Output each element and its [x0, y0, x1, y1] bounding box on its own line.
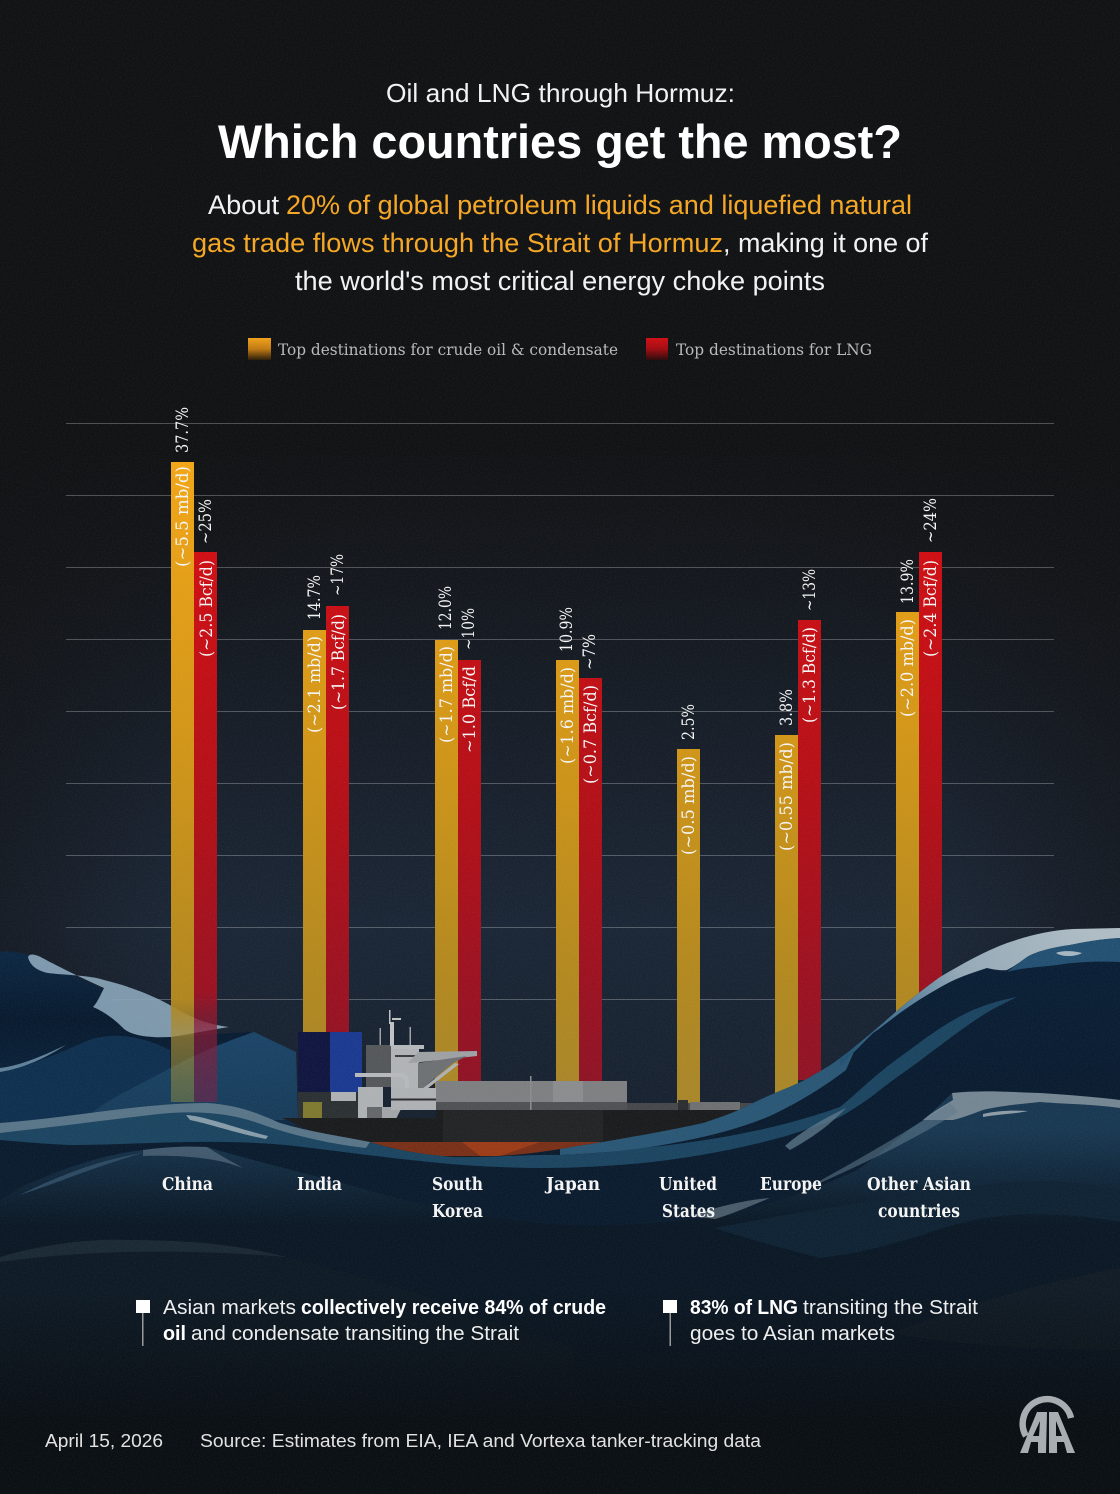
- second wave: [0, 1091, 1120, 1494]
- intro text block: About: [208, 190, 280, 220]
- value labels: Europe: (~0.55 mb/d): [777, 742, 796, 851]
- bars: India: [303, 606, 349, 1120]
- value labels: South Korea: ~1.0 Bcf/d: [460, 666, 479, 753]
- callout: crude oil share: collectively receive 84% of crude: [301, 1296, 606, 1319]
- value labels: India: (~1.7 Bcf/d): [329, 614, 348, 710]
- icon: AA logo: [1020, 1399, 1075, 1453]
- country labels: United: [659, 1175, 717, 1195]
- value labels: Other Asian countries: [898, 498, 940, 717]
- callout: LNG share: 83% of LNG: [690, 1296, 798, 1319]
- wave teal band: [0, 997, 1017, 1168]
- country labels: India: [297, 1175, 342, 1195]
- crest inner blue: [1007, 938, 1120, 972]
- date: April 15, 2026: [45, 1431, 163, 1451]
- bars: China: [171, 462, 217, 1102]
- bars: Europe: [775, 620, 821, 1095]
- callout: crude oil share: oil: [163, 1322, 186, 1345]
- value labels: Europe: [777, 569, 819, 851]
- teal crest edge running down-left: [560, 1047, 856, 1155]
- value labels: Europe: ~13%: [800, 569, 819, 611]
- legend: [248, 338, 872, 360]
- value labels: South Korea: (~1.7 mb/d): [437, 646, 456, 743]
- value labels: China: (~5.5 mb/d): [173, 466, 192, 567]
- callout: crude oil share: and condensate transiting the Strait: [191, 1322, 519, 1345]
- value labels: India: (~2.1 mb/d): [305, 636, 324, 733]
- country labels: South: [432, 1175, 483, 1195]
- title: Which countries get the most?: [218, 115, 902, 168]
- value labels: Japan: 10.9%: [557, 607, 576, 652]
- front waves: [0, 928, 1120, 1494]
- callout: LNG share: transiting the Strait: [803, 1296, 978, 1319]
- callout: LNG share: [663, 1296, 978, 1346]
- value labels: United States: (~0.5 mb/d): [679, 756, 698, 855]
- intro text block: [192, 190, 929, 296]
- bars: Other Asian countries: [896, 552, 942, 1022]
- value labels: Other Asian countries: (~2.4 Bcf/d): [921, 560, 940, 657]
- country labels: Other Asian: [867, 1175, 971, 1195]
- value labels: China: (~2.5 Bcf/d): [197, 560, 216, 657]
- main front wave: [0, 928, 1120, 1494]
- value labels: Japan: (~1.6 mb/d): [558, 667, 577, 764]
- intro text block: the world's most critical energy choke points: [295, 266, 825, 296]
- bar chart bars: [171, 462, 942, 1120]
- bars: United States: [677, 749, 700, 1104]
- country labels: China: [162, 1175, 213, 1195]
- source: Source: Estimates from EIA, IEA and Vortexa tanker-tracking data: [200, 1431, 762, 1451]
- value labels: South Korea: [436, 586, 479, 753]
- value labels: Other Asian countries: ~24%: [921, 498, 940, 543]
- country labels: Korea: [432, 1202, 483, 1222]
- back waves left: [0, 951, 298, 1135]
- value labels: Japan: ~7%: [580, 634, 599, 670]
- value labels: India: 14.7%: [305, 575, 324, 620]
- country labels: countries: [878, 1202, 960, 1222]
- large lower wave: [0, 1240, 600, 1494]
- value labels: United States: 2.5%: [679, 704, 698, 740]
- subtitle: oil and LNG through Hormuz: Oil and LNG through Hormuz:: [386, 78, 735, 108]
- value labels: China: 37.7%: [173, 407, 192, 453]
- country labels: States: [662, 1202, 715, 1222]
- intro text block: , making it one of: [723, 228, 929, 258]
- callout: crude oil share: Asian markets: [163, 1296, 296, 1319]
- value labels: China: ~25%: [196, 499, 215, 544]
- intro text block: 20% of global petroleum liquids and liquefied natural: [286, 190, 912, 220]
- value labels: South Korea: ~10%: [459, 608, 478, 650]
- value labels: South Korea: 12.0%: [436, 586, 455, 630]
- value labels: Japan: [557, 607, 600, 784]
- bars: Japan: [556, 660, 602, 1100]
- country labels: Europe: [760, 1175, 822, 1195]
- bars: South Korea: [435, 640, 481, 1090]
- lower right wave: [893, 1267, 1120, 1350]
- value labels: United States: [679, 704, 698, 855]
- gridlines: [66, 424, 1054, 1000]
- value labels: China: [173, 407, 216, 657]
- country labels: [162, 1175, 971, 1222]
- left crest foam: [0, 1103, 370, 1148]
- wave foam left: [28, 954, 229, 1037]
- right band lower wave: [714, 1181, 1120, 1258]
- value labels: Other Asian countries: (~2.0 mb/d): [898, 619, 917, 717]
- country labels: Japan: [544, 1175, 600, 1195]
- value labels: Europe: (~1.3 Bcf/d): [800, 627, 819, 723]
- streak on right wave: [785, 1108, 846, 1150]
- value labels: India: ~17%: [328, 554, 347, 596]
- crest foam right: [840, 928, 1120, 1067]
- value labels: India: [305, 554, 348, 733]
- legend: Top destinations for crude oil & condensate: [278, 340, 618, 359]
- callout: LNG share: goes to Asian markets: [690, 1322, 895, 1345]
- value labels: Japan: (~0.7 Bcf/d): [581, 685, 600, 784]
- value labels: Other Asian countries: 13.9%: [898, 559, 917, 604]
- foam on second wave: [923, 1091, 1120, 1120]
- value labels: Europe: 3.8%: [777, 689, 796, 726]
- intro text block: gas trade flows through the Strait of Hormuz: [192, 228, 723, 258]
- callout: crude oil share: [136, 1296, 606, 1346]
- tanker ship: [282, 1010, 780, 1160]
- legend: Top destinations for LNG: [676, 340, 872, 359]
